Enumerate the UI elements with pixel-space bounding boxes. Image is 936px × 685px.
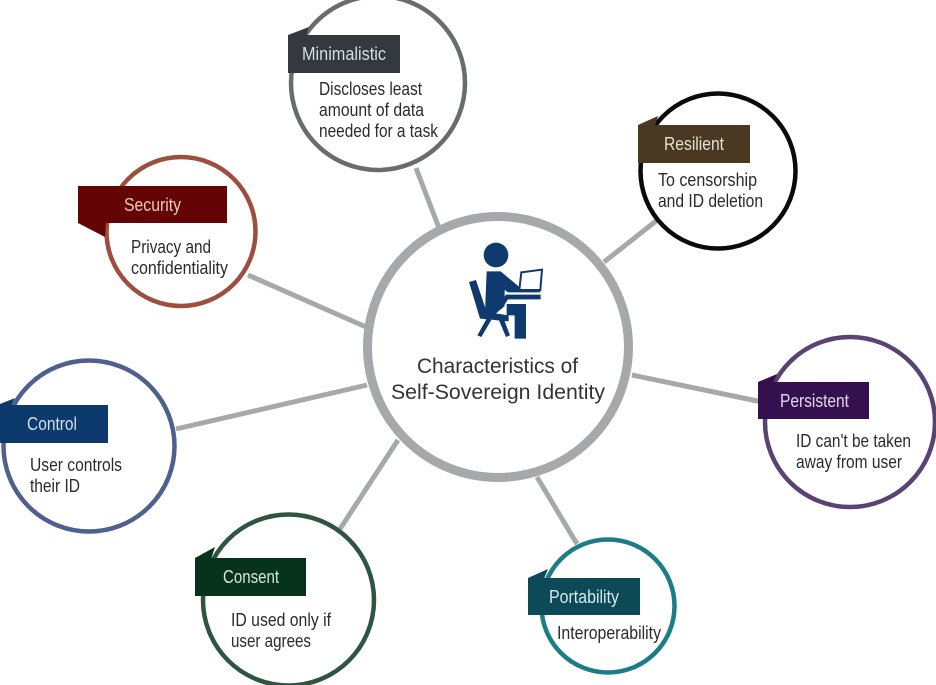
text: Persistent description: ID can't be taken <box>796 430 911 451</box>
text: Minimalistic description: amount of data <box>319 99 425 120</box>
text: Security description: confidentiality <box>131 257 229 278</box>
icon: person at laptop <box>469 243 542 339</box>
text: Security description: Privacy and <box>131 236 211 257</box>
panel: Security <box>78 157 256 306</box>
label: Resilient: Resilient <box>664 133 724 154</box>
panel: Control <box>0 360 174 532</box>
panel: Portability <box>528 540 674 672</box>
text: Persistent description <box>796 430 911 472</box>
label: Minimalistic: Minimalistic <box>302 43 386 64</box>
text: Minimalistic description: needed for a task <box>319 120 439 141</box>
label: Portability: Portability <box>549 586 620 607</box>
label: Minimalistic <box>288 27 400 73</box>
label: Security: Security <box>124 194 182 215</box>
text: Security description <box>131 236 229 278</box>
connector lines <box>176 168 762 544</box>
text: Control description <box>30 454 122 496</box>
panel: Persistent <box>758 337 935 507</box>
text: Persistent description: away from user <box>796 451 902 472</box>
label: Portability <box>528 569 640 615</box>
label: Control: Control <box>27 413 77 434</box>
text: Control description: User controls <box>30 454 122 475</box>
panel: Consent <box>195 514 374 685</box>
text: Minimalistic description: Discloses least <box>319 78 422 99</box>
text: Consent description: ID used only if <box>231 609 332 630</box>
panel: central hub <box>368 216 628 478</box>
label: Security <box>78 186 227 237</box>
text: Resilient description: and ID deletion <box>658 190 763 211</box>
central title <box>391 354 605 404</box>
label: Resilient <box>638 116 750 163</box>
text: Portability description: Interoperability <box>557 622 662 643</box>
text: Consent description <box>231 609 332 651</box>
panel: Minimalistic <box>288 0 465 170</box>
label: Persistent: Persistent <box>780 390 849 411</box>
label: Consent: Consent <box>223 566 279 587</box>
text: Control description: their ID <box>30 475 80 496</box>
label: Consent <box>195 547 306 596</box>
text: Minimalistic description <box>319 78 439 141</box>
label: Persistent <box>758 374 869 419</box>
label: Control <box>0 398 108 443</box>
central title: Characteristics of <box>417 354 578 378</box>
text: Resilient description: To censorship <box>658 169 757 190</box>
text: Consent description: user agrees <box>231 630 311 651</box>
text: Resilient description <box>658 169 763 211</box>
central title: Self-Sovereign Identity <box>391 380 605 404</box>
panel: Resilient <box>638 94 796 248</box>
